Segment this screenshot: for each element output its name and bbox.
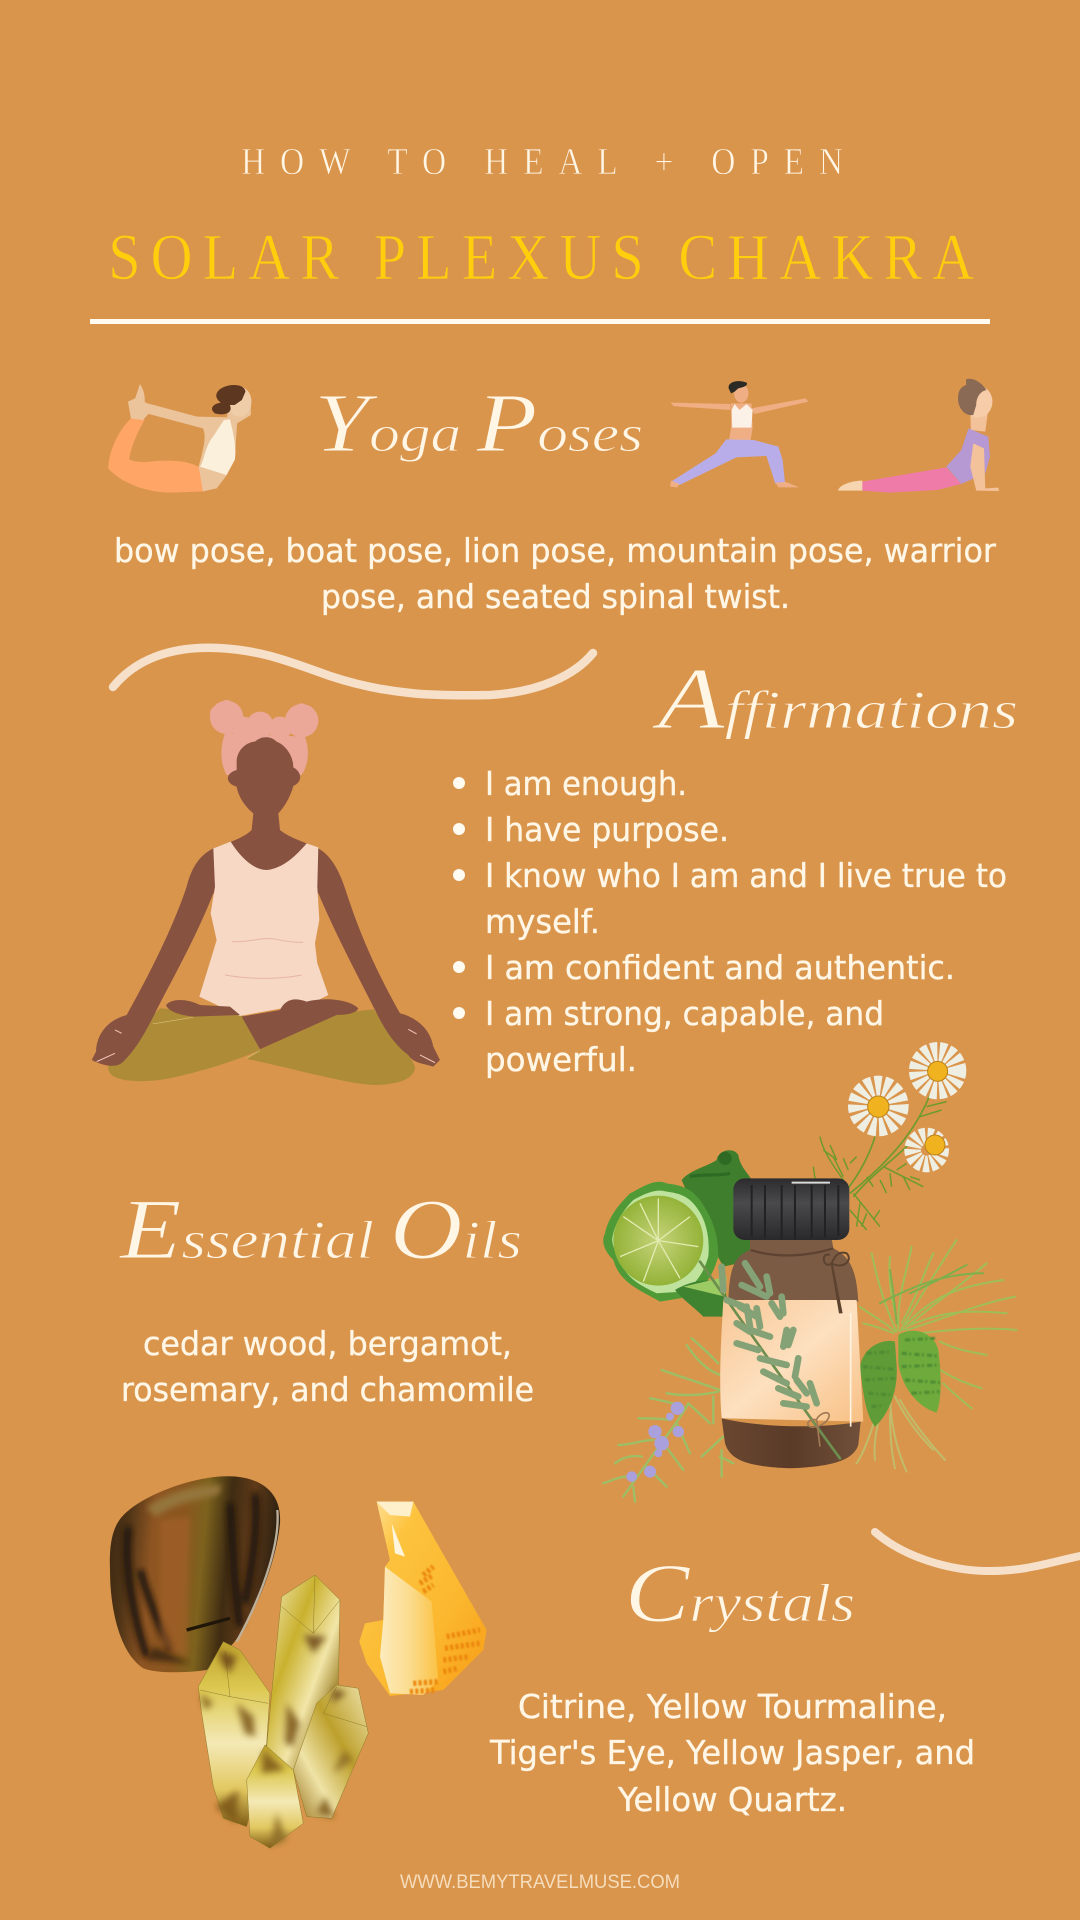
main title: SOLAR PLEXUS CHAKRA — [108, 222, 974, 294]
chamomile stems — [813, 1095, 947, 1230]
lavender — [626, 1402, 684, 1482]
heading: Essential Oils: Essential Oils — [118, 1181, 522, 1277]
needles — [857, 1240, 1017, 1472]
heading: Yoga Poses: Yoga Poses — [314, 377, 643, 470]
list text: myself. — [485, 903, 600, 941]
list text: I am enough. — [485, 765, 687, 803]
crystals description: Tiger's Eye, Yellow Jasper, and — [489, 1734, 975, 1772]
heading: Affirmations: Affirmations — [652, 651, 1018, 748]
crystals description: Citrine, Yellow Tourmaline, — [518, 1688, 947, 1726]
rosemary sprig — [700, 1262, 840, 1458]
bottle — [700, 1178, 863, 1468]
lower left rosemary — [603, 1338, 733, 1502]
list text: I am strong, capable, and — [485, 995, 884, 1033]
crystals description — [489, 1688, 975, 1819]
list text: I have purpose. — [485, 811, 729, 849]
list text — [485, 765, 1007, 1079]
list text: I know who I am and I live true to — [485, 857, 1007, 895]
bergamot — [682, 1150, 753, 1267]
yoga poses description: pose, and seated spinal twist. — [321, 578, 790, 616]
quartz cluster — [198, 1575, 368, 1848]
shirt — [199, 842, 328, 1016]
illustration: bow pose — [108, 384, 251, 493]
illustration: warrior pose — [670, 381, 808, 487]
legs — [108, 1008, 260, 1081]
illustration: cobra pose — [838, 379, 999, 493]
title block — [90, 140, 990, 324]
chamomile flowers — [859, 1052, 956, 1164]
yoga poses description: bow pose, boat pose, lion pose, mountain pose, warrior — [114, 532, 997, 570]
list text: powerful. — [485, 1041, 637, 1079]
title rule — [90, 319, 990, 324]
essential oils description: cedar wood, bergamot, — [143, 1325, 512, 1363]
green cones — [860, 1331, 941, 1427]
illustration: crystals — [110, 1476, 487, 1848]
illustration: meditating woman — [92, 700, 440, 1085]
twine bow — [824, 1253, 849, 1313]
essential oils description: rosemary, and chamomile — [121, 1371, 534, 1409]
decorative swoosh top — [113, 648, 593, 695]
skin — [92, 737, 440, 1067]
yoga poses description — [114, 532, 997, 616]
hair — [210, 700, 318, 775]
feet — [166, 1000, 240, 1017]
bullets — [453, 777, 465, 1019]
crystals description: Yellow Quartz. — [617, 1781, 847, 1819]
citrine — [359, 1502, 487, 1696]
subtitle: HOW TO HEAL + OPEN — [241, 140, 843, 182]
bottle cap — [733, 1178, 849, 1240]
decorative swoosh bottom — [875, 1532, 1080, 1571]
affirmations list — [453, 765, 1007, 1079]
heading: Crystals: Crystals — [625, 1547, 855, 1640]
list text: I am confident and authentic. — [485, 949, 955, 987]
essential oils description — [121, 1325, 534, 1409]
tiger's eye stone — [110, 1476, 280, 1672]
website footer: WWW.BEMYTRAVELMUSE.COM — [400, 1872, 680, 1893]
illustration: essential oil bottle with herbs — [603, 1052, 1017, 1502]
